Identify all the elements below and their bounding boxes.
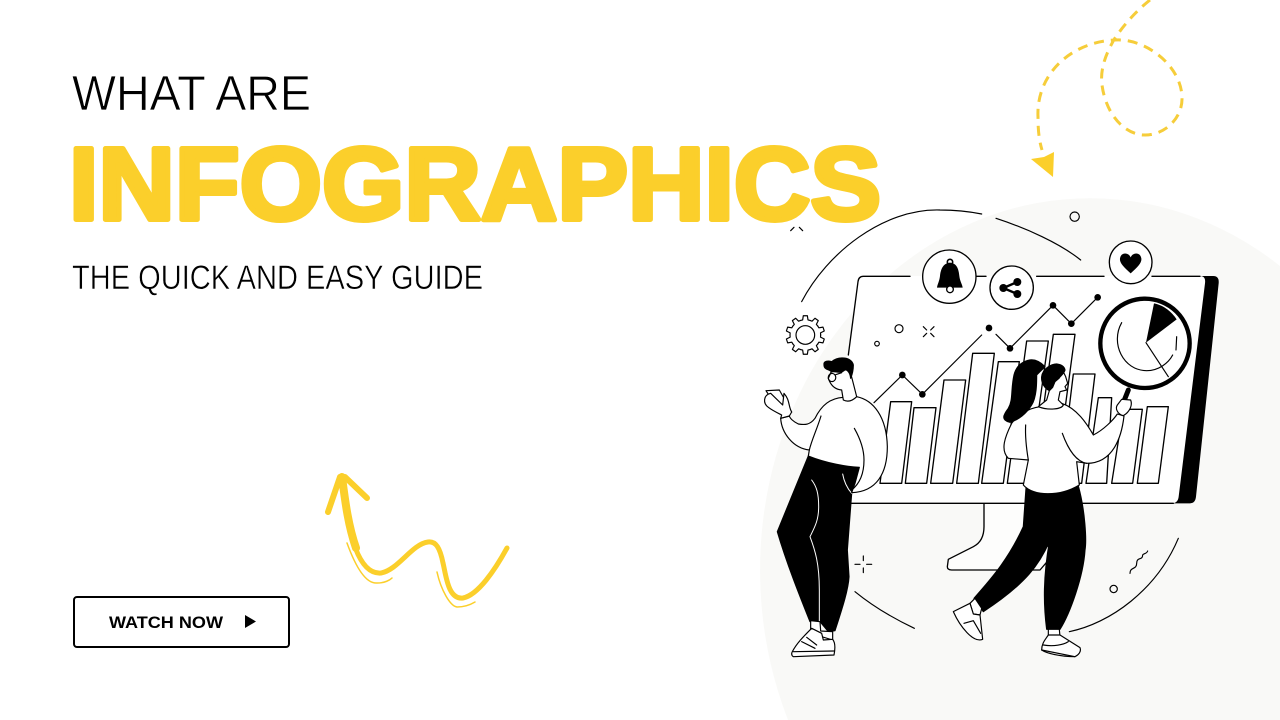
dashed yellow arrow bbox=[1031, 0, 1182, 177]
man: phone and hand bbox=[766, 390, 792, 415]
woman: sweater and arm bbox=[1004, 403, 1124, 494]
play icon bbox=[245, 615, 256, 628]
icon: gear bbox=[786, 316, 825, 354]
woman: socks and shoes bbox=[970, 598, 982, 615]
title: infographics: INFOGRAPHICS bbox=[69, 126, 881, 242]
monitor side bbox=[1173, 276, 1219, 503]
woman: hair bbox=[1042, 364, 1065, 391]
monitor stand bbox=[947, 503, 1050, 570]
man: sweater bbox=[781, 397, 887, 493]
yellow hand-drawn arrow bbox=[328, 477, 507, 607]
man: neck and face bbox=[828, 368, 857, 401]
icon: share bbox=[990, 266, 1033, 309]
man: socks and shoes bbox=[811, 621, 833, 640]
icon: bell bbox=[923, 250, 976, 303]
woman: ponytail bbox=[1004, 360, 1045, 422]
woman bbox=[953, 360, 1131, 657]
pie wedge bbox=[1146, 303, 1177, 343]
woman: trousers bbox=[974, 486, 1086, 629]
arrow head bbox=[1031, 152, 1054, 177]
background blob bbox=[760, 198, 1280, 720]
magnifier with pie chart bbox=[1100, 299, 1190, 404]
small decorations bbox=[791, 212, 1148, 593]
man: trousers bbox=[777, 456, 859, 632]
man: glasses bbox=[828, 373, 842, 382]
button: watch now bbox=[74, 597, 289, 647]
decorative large arc bbox=[802, 210, 1178, 632]
man bbox=[765, 358, 887, 657]
monitor screen bbox=[827, 276, 1205, 503]
man: hair bbox=[824, 358, 853, 378]
woman: neck and face bbox=[1038, 368, 1068, 409]
bar chart bbox=[880, 334, 1168, 483]
woman: hand bbox=[1116, 399, 1131, 416]
line chart bbox=[874, 294, 1101, 403]
title: what are: WHAT ARE bbox=[72, 67, 311, 121]
subtitle: THE QUICK AND EASY GUIDE bbox=[72, 259, 483, 297]
icon: heart bbox=[1109, 241, 1152, 284]
illustration bbox=[765, 210, 1219, 657]
button label: WATCH NOW bbox=[109, 613, 224, 632]
